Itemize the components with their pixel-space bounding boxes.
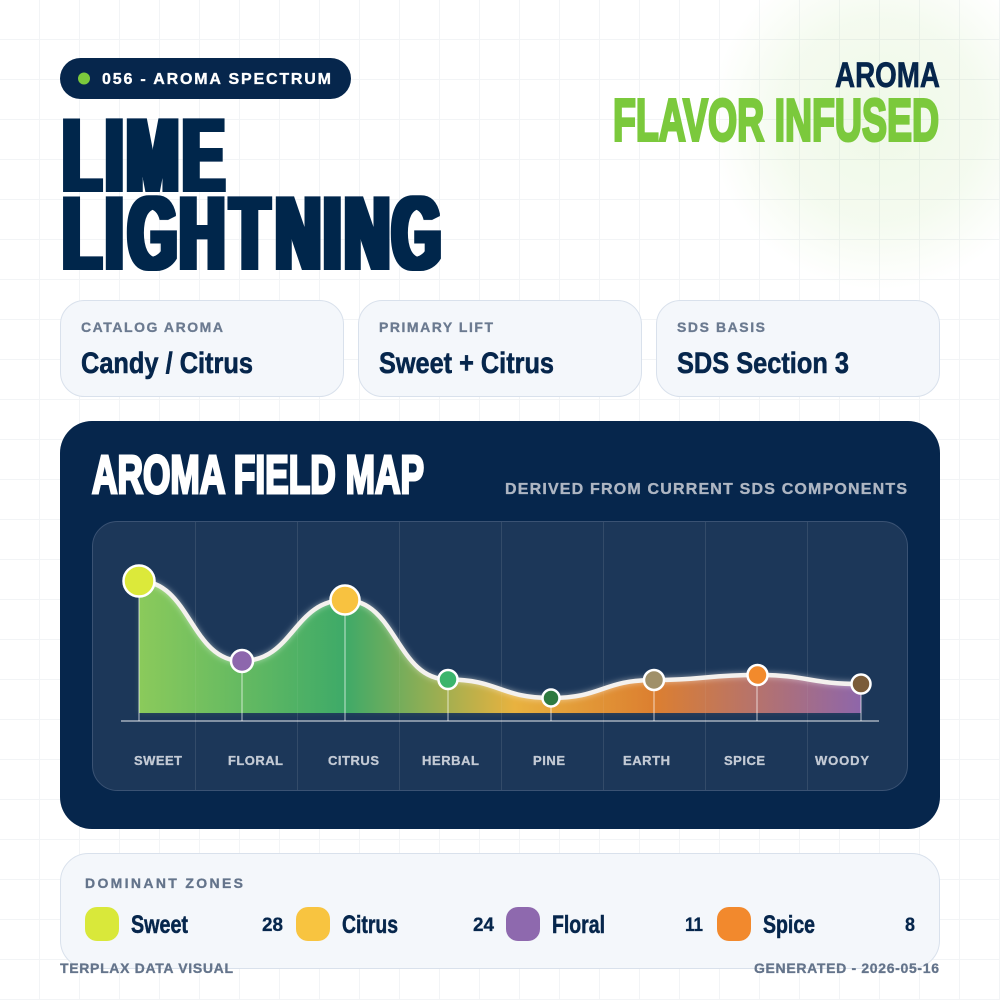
markers <box>124 566 870 706</box>
panel: sds basis: SDS BASIS <box>677 319 765 335</box>
axis labels: WOODY <box>815 753 869 768</box>
footer: brand: TERPLAX DATA VISUAL <box>60 960 233 976</box>
axis labels: CITRUS <box>328 753 379 768</box>
area glow <box>139 581 861 713</box>
axis labels: SPICE <box>724 753 765 768</box>
chart: aroma curve <box>92 522 908 790</box>
legend: citrus <box>296 907 494 941</box>
footer: generated date: GENERATED - 2026-05-16 <box>754 960 939 976</box>
legend: floral: 11 <box>685 915 703 936</box>
axis labels: FLORAL <box>228 753 283 768</box>
title: Lime Lightning <box>63 98 441 292</box>
panel: primary lift: PRIMARY LIFT <box>379 319 493 335</box>
title: Lime Lightning: LIGHTNING <box>63 176 441 292</box>
axis labels: HERBAL <box>422 753 479 768</box>
legend: citrus: 24 <box>473 915 494 936</box>
legend: sweet: Sweet <box>131 911 189 939</box>
panel: catalog aroma: CATALOG AROMA <box>81 319 223 335</box>
panel: sds basis: SDS Section 3 <box>677 347 849 380</box>
axis labels: PINE <box>533 753 565 768</box>
curve line <box>139 581 861 698</box>
heading: aroma field map: AROMA FIELD MAP <box>92 445 424 505</box>
panel: catalog aroma <box>60 300 344 396</box>
legend: citrus: Citrus <box>342 911 398 939</box>
axis <box>121 720 879 722</box>
panel: sds basis <box>656 300 940 396</box>
legend: spice: 8 <box>905 915 915 936</box>
legend: spice: Spice <box>763 911 815 939</box>
subtitle: derived from sds: DERIVED FROM CURRENT SDS COMPONENTS <box>505 481 907 498</box>
panel: catalog aroma: Candy / Citrus <box>81 347 253 380</box>
area fill <box>139 581 861 713</box>
axis labels: EARTH <box>623 753 670 768</box>
legend: sweet: 28 <box>262 915 283 936</box>
axis labels <box>134 753 869 768</box>
panel: dominant zones <box>60 854 940 968</box>
legend: sweet <box>85 907 283 941</box>
panel: aroma field map <box>60 421 940 829</box>
badge: 056 aroma spectrum: 056 - AROMA SPECTRUM <box>102 71 331 88</box>
legend: spice <box>717 907 915 941</box>
axis labels: SWEET <box>134 753 182 768</box>
heading: aroma: AROMA <box>835 56 940 95</box>
heading: dominant zones: DOMINANT ZONES <box>85 875 243 891</box>
title: Lime Lightning: LIME <box>63 98 224 214</box>
badge: 056 aroma spectrum <box>60 58 351 99</box>
panel: primary lift <box>358 300 642 396</box>
panel: primary lift: Sweet + Citrus <box>379 347 554 380</box>
stems <box>139 581 861 721</box>
legend: floral: Floral <box>552 911 605 939</box>
legend: floral <box>506 907 703 941</box>
